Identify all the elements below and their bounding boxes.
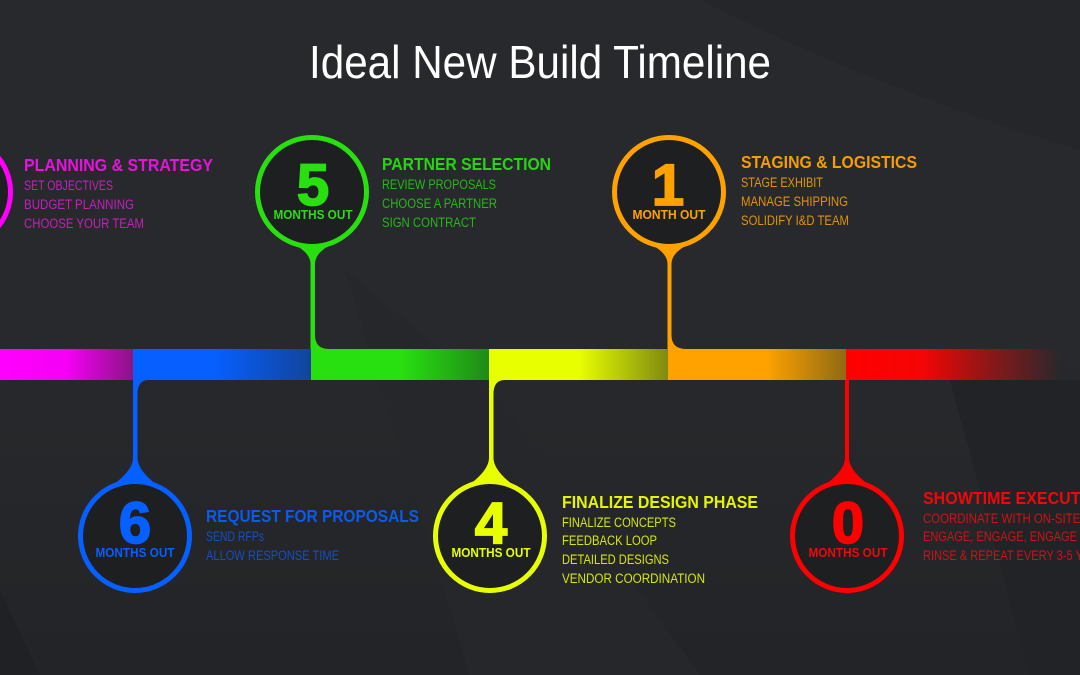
list: design tasks: DETAILED DESIGNS — [562, 552, 669, 567]
list: design tasks — [562, 515, 705, 586]
list: staging tasks — [741, 175, 849, 228]
months label: MONTHS OUT — [452, 545, 531, 560]
heading: staging and logistics: STAGING & LOGISTICS — [741, 152, 917, 172]
icon: cropped magenta circle — [0, 138, 10, 246]
heading: planning and strategy: PLANNING & STRATEGY — [24, 155, 213, 175]
milestone: 0 months out — [792, 380, 1080, 590]
badge circle — [614, 138, 724, 246]
badge circle — [80, 482, 190, 590]
list: showtime tasks — [923, 511, 1080, 563]
list: staging tasks: MANAGE SHIPPING — [741, 194, 848, 209]
list: staging tasks: STAGE EXHIBIT — [741, 175, 823, 190]
list: design tasks: FEEDBACK LOOP — [562, 533, 657, 548]
badge circle — [792, 482, 902, 590]
list: planning tasks — [24, 178, 144, 231]
connector stem — [113, 380, 157, 485]
list: partner tasks: CHOOSE A PARTNER — [382, 196, 497, 211]
list: planning tasks: SET OBJECTIVES — [24, 178, 113, 193]
milestone: 4 months out — [436, 380, 758, 590]
list: planning tasks: BUDGET PLANNING — [24, 197, 134, 212]
heading: finalize design phase: FINALIZE DESIGN PHASE — [562, 492, 758, 512]
heading: partner selection: PARTNER SELECTION — [382, 154, 551, 174]
list: partner tasks: REVIEW PROPOSALS — [382, 177, 496, 192]
number: 6 — [119, 491, 151, 556]
list: partner tasks — [382, 177, 497, 230]
list: partner tasks: SIGN CONTRACT — [382, 215, 476, 230]
timeline bar — [0, 349, 1062, 380]
title: Ideal New Build Timeline — [309, 36, 771, 88]
number: 4 — [475, 491, 507, 556]
months label: MONTHS OUT — [96, 545, 175, 560]
list: proposal tasks — [206, 529, 339, 563]
milestone: 1 month out — [614, 138, 917, 349]
list: proposal tasks: SEND RFPs — [206, 529, 264, 544]
badge circle — [258, 138, 366, 246]
connector stem — [469, 380, 513, 485]
months label: MONTHS OUT — [808, 545, 888, 560]
milestone: 7 months, planning and strategy — [0, 138, 213, 246]
milestone: 6 months out — [80, 380, 419, 590]
list: design tasks: VENDOR COORDINATION — [562, 571, 705, 586]
list: design tasks: FINALIZE CONCEPTS — [562, 515, 676, 530]
connector stem — [291, 243, 334, 349]
heading: request for proposals: REQUEST FOR PROPOSALS — [206, 506, 419, 526]
number: 0 — [832, 491, 864, 556]
list: proposal tasks: ALLOW RESPONSE TIME — [206, 548, 339, 563]
number: 5 — [297, 153, 329, 218]
connector stem — [825, 380, 869, 485]
number: 1 — [652, 153, 684, 218]
list: planning tasks: CHOOSE YOUR TEAM — [24, 216, 144, 231]
milestone: 5 months out — [258, 138, 551, 349]
months label: MONTHS OUT — [274, 207, 353, 222]
connector stem — [648, 243, 691, 349]
list: staging tasks: SOLIDIFY I&D TEAM — [741, 213, 849, 228]
months label: MONTH OUT — [632, 207, 706, 222]
badge circle — [436, 482, 544, 590]
